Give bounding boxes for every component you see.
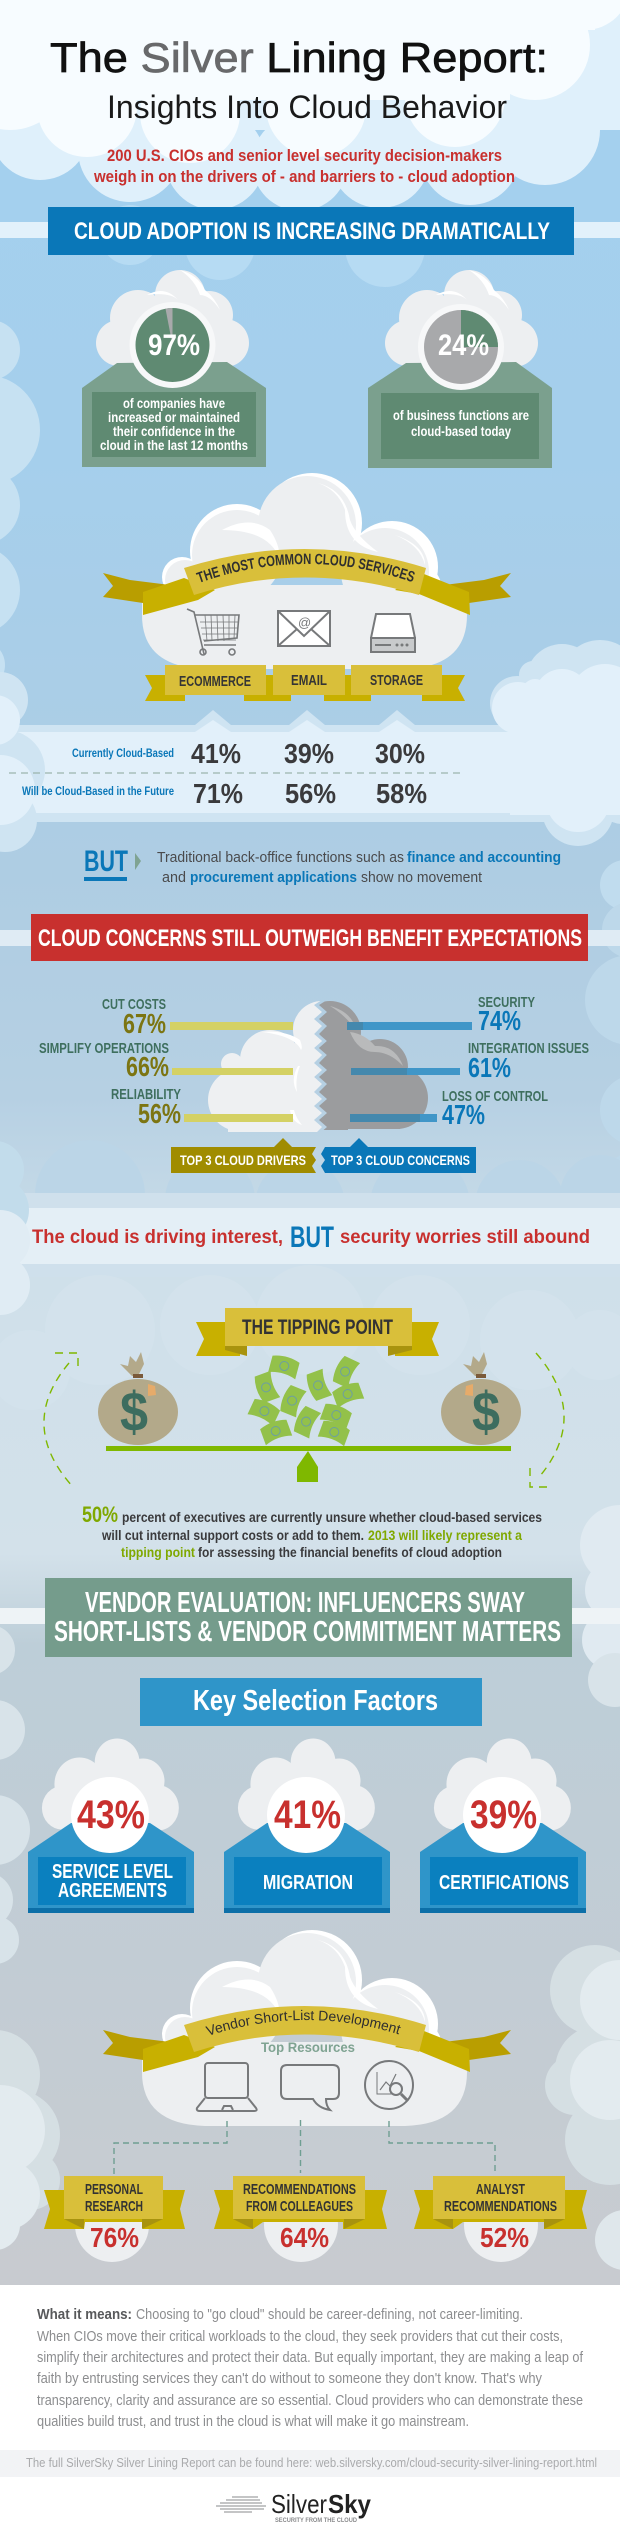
split cloud xyxy=(208,1001,428,1132)
heading: key selection factors xyxy=(140,1678,482,1726)
resource: analyst recommendations: 52% xyxy=(480,2222,529,2253)
callout: BUT: procurement applications xyxy=(190,870,357,886)
tipping point text: percent of executives are currently unsure whether cloud-based services xyxy=(122,1509,542,1525)
icon: shopping cart xyxy=(187,609,239,655)
stat: 97%: cloud in the last 12 months xyxy=(100,438,248,453)
title: The Silver Lining Report: xyxy=(50,34,548,81)
statement: security worries: security worries still abound xyxy=(340,1227,590,1248)
card: certifications: 39% xyxy=(470,1793,537,1837)
concern labels: SECURITY xyxy=(478,994,535,1011)
statement: security worries xyxy=(32,1221,590,1254)
left cloud beside figures xyxy=(0,672,45,852)
statement: security worries: The cloud is driving interest, xyxy=(32,1227,283,1248)
panel: the tipping point xyxy=(44,1308,564,1560)
callout: BUT: show no movement xyxy=(361,870,482,886)
heading ribbon: THE TIPPING POINT xyxy=(242,1316,393,1339)
resource: recommendations from colleagues xyxy=(214,2176,387,2262)
table: service percentages: 71% xyxy=(193,778,243,809)
stat: 97%: of companies have xyxy=(123,396,225,411)
resource: analyst recommendations: RECOMMENDATIONS xyxy=(444,2198,557,2215)
icon: right money bag xyxy=(441,1352,521,1445)
right cloud beside figures xyxy=(490,640,620,846)
what it means text: What it means: xyxy=(37,2307,132,2323)
driver labels: RELIABILITY xyxy=(111,1086,181,1103)
service ribbons: ECOMMERCE xyxy=(179,673,251,690)
driver labels xyxy=(39,996,181,1129)
heading ribbon xyxy=(196,1308,439,1356)
banner: cloud concerns xyxy=(31,914,588,961)
stat: 97%: increased or maintained xyxy=(108,410,240,425)
concern labels: LOSS OF CONTROL xyxy=(442,1088,548,1105)
heading: key selection factors: Key Selection Factors xyxy=(193,1685,438,1717)
card: service level agreements: 43% xyxy=(77,1793,145,1837)
concern labels: 74% xyxy=(478,1005,521,1036)
white footer background xyxy=(0,2285,620,2547)
tipping point text: for assessing the financial benefits of cloud adoption xyxy=(198,1544,502,1560)
icon: laptop xyxy=(197,2063,257,2111)
driver labels: SIMPLIFY OPERATIONS xyxy=(39,1040,169,1057)
card: migration xyxy=(224,1738,390,1913)
table: service percentages: 56% xyxy=(285,778,336,809)
logo: SilverSky: SECURITY FROM THE CLOUD xyxy=(275,2518,358,2524)
dashed arrow left xyxy=(44,1353,78,1487)
intro text: 200 U.S. CIOs and senior level security decision-makers xyxy=(107,146,502,165)
table: service percentages: Currently Cloud-Based xyxy=(72,746,174,760)
concern bars xyxy=(347,1022,472,1122)
logo: SilverSky: Silver xyxy=(271,2489,327,2519)
table: service percentages: 30% xyxy=(375,738,425,769)
resource: personal research: PERSONAL xyxy=(85,2181,143,2198)
tipping point text: will cut internal support costs or add to them. xyxy=(101,1527,364,1543)
resource: personal research: 76% xyxy=(90,2222,139,2253)
what it means text: Choosing to "go cloud" should be career-defining, not career-limiting. xyxy=(136,2307,523,2323)
driver labels: 67% xyxy=(123,1008,166,1039)
panel: most common cloud services: THE MOST COMMON CLOUD SERVICES xyxy=(196,554,415,582)
full report link band xyxy=(0,2450,620,2477)
table: service percentages: Will be Cloud-Based in the Future xyxy=(22,784,174,798)
card: service level agreements xyxy=(28,1738,194,1913)
stat: 97%: their confidence in the xyxy=(113,424,235,439)
band behind concerns banner xyxy=(0,930,620,946)
logo: SilverSky xyxy=(216,2489,371,2524)
card: migration: MIGRATION xyxy=(263,1872,353,1894)
table: service percentages: 41% xyxy=(191,738,241,769)
tag: top 3 drivers xyxy=(171,1138,316,1173)
table: service percentages: 58% xyxy=(376,778,427,809)
icon: right money bag: $ xyxy=(472,1380,500,1443)
icon: magnifier chart xyxy=(365,2061,413,2109)
driver labels: 66% xyxy=(126,1051,169,1082)
figures band xyxy=(0,710,620,822)
intro text xyxy=(93,146,515,186)
driver labels: 56% xyxy=(138,1098,181,1129)
card: certifications: CERTIFICATIONS xyxy=(439,1872,569,1894)
banner: cloud adoption xyxy=(48,207,574,255)
icon: left money bag xyxy=(98,1352,178,1445)
concern labels xyxy=(442,994,589,1130)
resource: analyst recommendations xyxy=(414,2176,587,2262)
card: migration: 41% xyxy=(274,1793,341,1837)
icon: left money bag: $ xyxy=(120,1380,148,1443)
stat: 24%: of business functions are xyxy=(393,408,529,423)
resource: personal research: RESEARCH xyxy=(85,2198,143,2215)
callout: BUT: Traditional back-office functions such as xyxy=(157,850,404,866)
tipping point text xyxy=(82,1502,542,1560)
driver labels: CUT COSTS xyxy=(102,996,166,1013)
stat: 24%: cloud-based today xyxy=(411,424,511,439)
what it means text: qualities build trust, and trust in the cloud is what will make it go mainstream. xyxy=(37,2414,469,2430)
callout: BUT: BUT xyxy=(84,845,128,878)
intro text: weigh in on the drivers of - and barriers to - cloud adoption xyxy=(93,167,515,186)
resource: personal research xyxy=(44,2176,185,2262)
tipping point text: 2013 will likely represent a xyxy=(368,1527,522,1543)
callout: BUT xyxy=(84,845,561,886)
subtitle: Insights Into Cloud Behavior xyxy=(107,89,507,125)
concern labels: 47% xyxy=(442,1099,485,1130)
resource: recommendations from colleagues: 64% xyxy=(280,2222,329,2253)
stat: 97%: 97% xyxy=(148,329,200,362)
logo: SilverSky: Sky xyxy=(328,2489,371,2519)
panel: vendor short-list development xyxy=(44,1930,587,2262)
resource: recommendations from colleagues: RECOMMENDATIONS xyxy=(243,2181,356,2198)
panel: vendor short-list development: Top Resources xyxy=(261,2039,355,2055)
balance beam xyxy=(106,1446,511,1482)
stat: 97% xyxy=(82,270,266,467)
panel: most common cloud services xyxy=(103,473,511,701)
driver bars xyxy=(170,1022,293,1122)
icon: speech bubble xyxy=(281,2065,339,2110)
banner: vendor evaluation xyxy=(45,1578,572,1657)
service ribbons: STORAGE xyxy=(370,672,423,689)
resource: recommendations from colleagues: FROM COLLEAGUES xyxy=(246,2198,353,2215)
icon: email envelope xyxy=(278,611,330,646)
concern labels: 61% xyxy=(468,1052,511,1083)
service ribbons: EMAIL xyxy=(291,672,327,689)
tipping point text: 50% xyxy=(82,1502,118,1527)
stat: 24%: 24% xyxy=(438,329,489,362)
what it means text: When CIOs move their critical workloads to the cloud, they seek providers that cut their costs, xyxy=(37,2329,563,2345)
icon: storage drive xyxy=(371,614,415,652)
resource: analyst recommendations: ANALYST xyxy=(476,2181,525,2198)
table: service percentages: 39% xyxy=(284,738,334,769)
statement: security worries: BUT xyxy=(290,1221,334,1254)
card: service level agreements: SERVICE LEVEL xyxy=(52,1861,173,1883)
what it means text: faith by entrusting services they can't do without to someone they don't know. That's why xyxy=(37,2371,543,2387)
callout: BUT: and xyxy=(162,870,186,886)
tag: top 3 concerns xyxy=(321,1138,476,1173)
money bills xyxy=(248,1353,364,1446)
concern bars over cloud xyxy=(347,1022,420,1122)
service ribbons xyxy=(145,665,465,701)
tag: top 3 drivers: TOP 3 CLOUD DRIVERS xyxy=(180,1152,306,1168)
dashed connectors xyxy=(114,2120,495,2176)
tipping point text: tipping point xyxy=(121,1544,195,1560)
callout: BUT: finance and accounting xyxy=(407,850,561,866)
panel: vendor short-list development: Vendor Short-List Development xyxy=(205,2010,401,2035)
stat: 24% xyxy=(368,270,552,468)
card: certifications xyxy=(420,1738,586,1913)
icon: email envelope: @ xyxy=(298,615,311,630)
table: service percentages xyxy=(9,738,461,809)
dashed arrow right xyxy=(530,1353,564,1487)
chart: drivers and concerns xyxy=(39,994,589,1173)
tag: top 3 concerns: TOP 3 CLOUD CONCERNS xyxy=(331,1152,470,1168)
what it means text xyxy=(37,2307,584,2430)
card: service level agreements: AGREEMENTS xyxy=(58,1880,167,1902)
